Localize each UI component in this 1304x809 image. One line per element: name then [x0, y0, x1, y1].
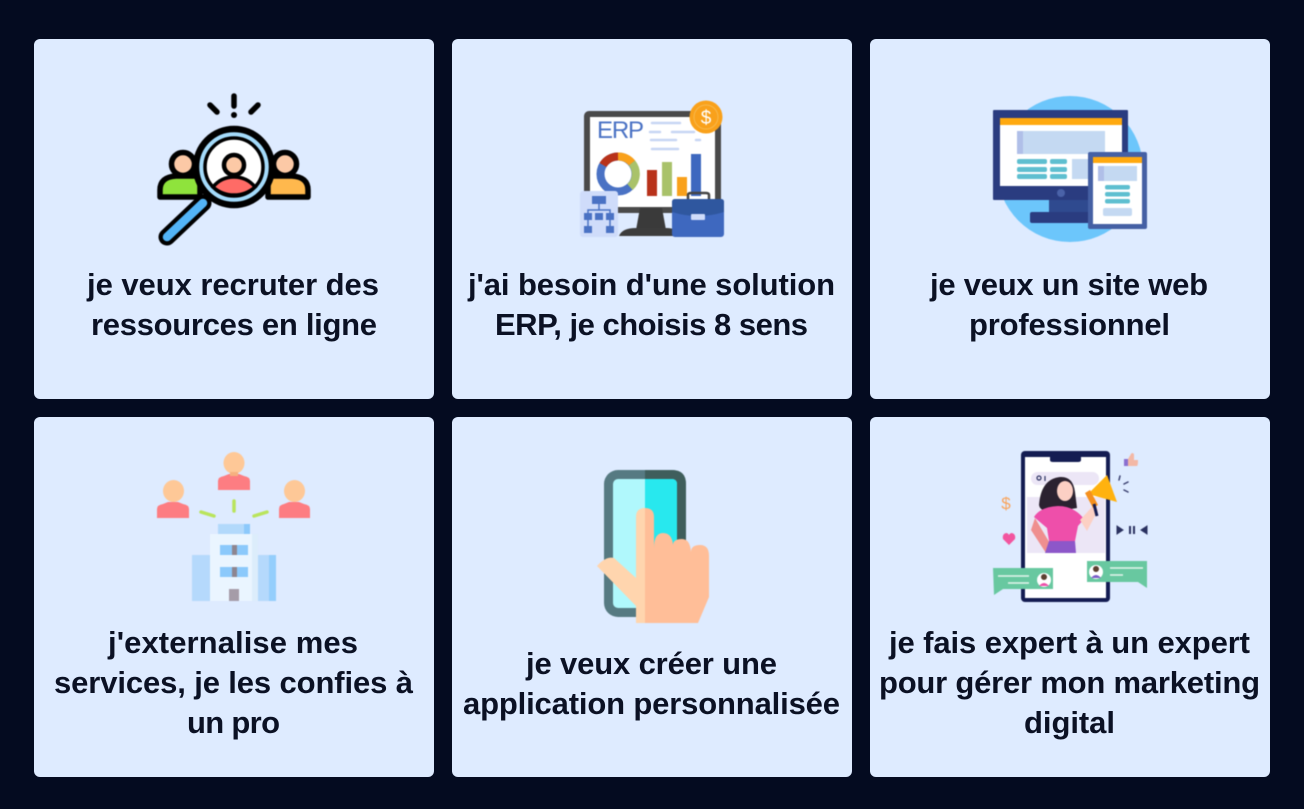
heading: marketing digital: je fais expert à un expert — [888, 625, 1250, 660]
icon: monitor and tablet — [993, 96, 1147, 242]
icon: phone with influencer: $ — [1001, 494, 1011, 513]
heading: site web: professionnel — [969, 307, 1170, 342]
heading: recruter: ressources en ligne — [91, 307, 377, 342]
panel: externaliser — [34, 417, 434, 777]
heading: application: je veux créer une — [525, 646, 777, 681]
heading: ERP — [467, 267, 835, 342]
heading: recruter — [86, 267, 379, 342]
icon: phone with influencer — [993, 451, 1147, 602]
panel: marketing digital — [870, 417, 1270, 777]
heading: site web: je veux un site web — [929, 267, 1208, 302]
heading: ERP: j'ai besoin d'une solution — [467, 267, 835, 302]
icon: people and building — [157, 452, 310, 601]
heading: application — [463, 646, 840, 721]
heading: externaliser — [54, 625, 414, 740]
panel: site web — [870, 39, 1270, 399]
heading: externaliser: services, je les confies à — [54, 665, 414, 700]
panel: ERP — [452, 39, 852, 399]
heading: marketing digital: pour gérer mon marketing — [879, 665, 1260, 700]
icon: hand on smartphone — [597, 470, 709, 623]
icon: ERP monitor: $ — [701, 108, 712, 129]
icon: ERP monitor: ERP — [597, 117, 644, 144]
icon: ERP monitor — [580, 100, 724, 237]
heading: application: application personnalisée — [463, 686, 840, 721]
heading: externaliser: un pro — [187, 705, 280, 740]
heading: marketing digital: digital — [1024, 705, 1115, 740]
heading: recruter: je veux recruter des — [86, 267, 379, 302]
panel: recruter — [34, 39, 434, 399]
heading: marketing digital — [879, 625, 1260, 740]
icon: magnifier over people — [160, 96, 308, 237]
panel: application — [452, 417, 852, 777]
heading: externaliser: j'externalise mes — [107, 625, 358, 660]
heading: ERP: ERP, je choisis 8 sens — [495, 307, 808, 342]
heading: site web — [929, 267, 1208, 342]
